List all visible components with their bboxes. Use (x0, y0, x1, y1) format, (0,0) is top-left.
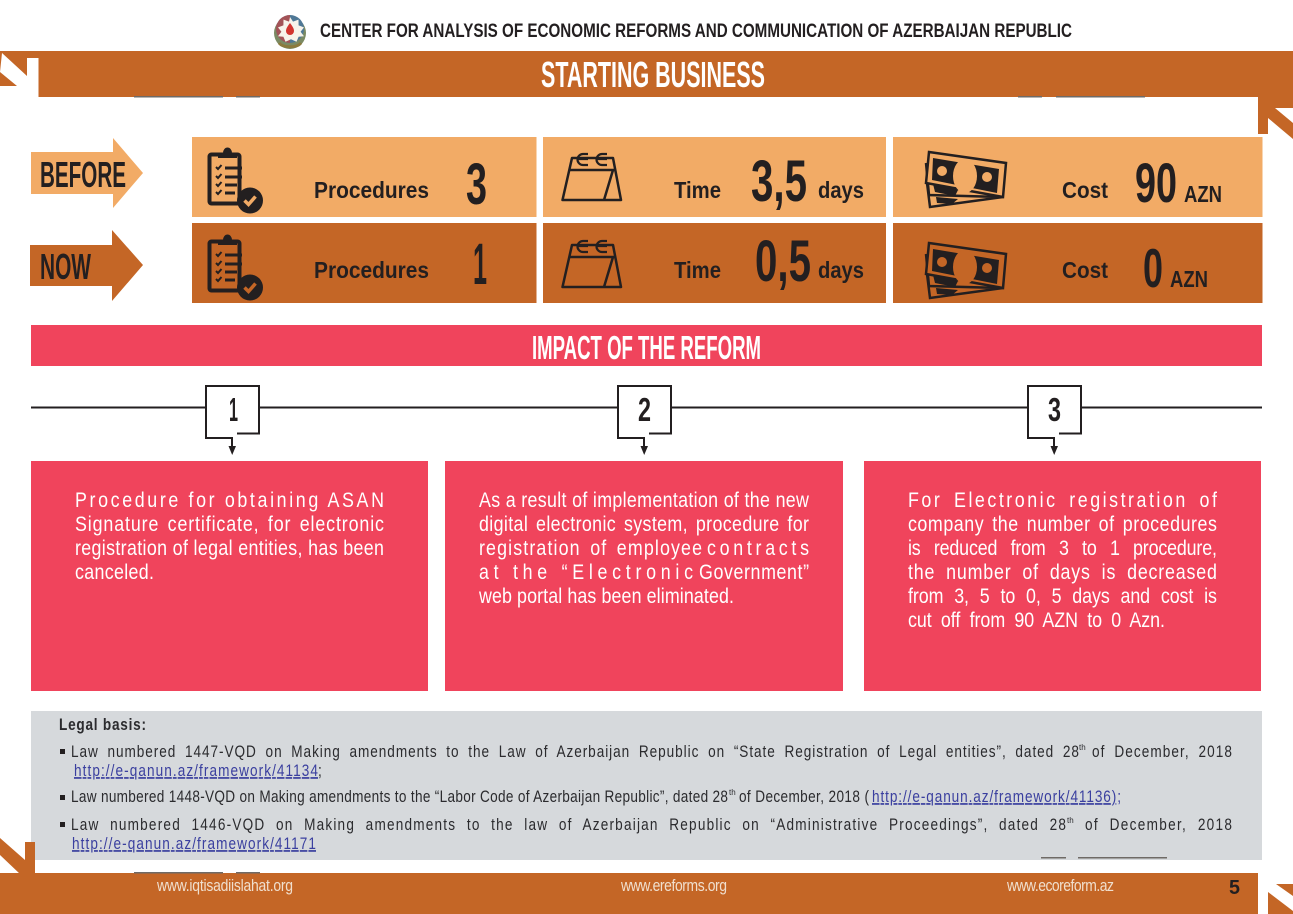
impact 2 text: web portal has been eliminated. (478, 585, 734, 608)
arrow label: now (30, 230, 143, 301)
marker: step 1 (206, 386, 259, 455)
impact 2 text: registration of employee (479, 537, 702, 560)
law 1448-VQD: Law numbered 1448-VQD on Making amendments to the “Labor Code of Azerbaijan Republic”, dated 28 (71, 788, 728, 806)
arrow label: now: NOW (40, 246, 91, 287)
law 1447-VQD: of December, 2018 (1092, 743, 1232, 761)
header organisation name: CENTER FOR ANALYSIS OF ECONOMIC REFORMS AND COMMUNICATION OF AZERBAIJAN REPUBLIC (320, 21, 1072, 42)
marker: step 3 (1028, 386, 1081, 455)
impact 3 text (908, 489, 1217, 632)
icon: emblem of Azerbaijan (274, 15, 306, 49)
icon: clipboard (210, 148, 263, 214)
law 1448-VQD: th (729, 788, 736, 797)
law 1448-VQD: of December, 2018 ( (739, 788, 870, 806)
panel: impact 1 (31, 461, 428, 691)
label: procedures: Procedures (314, 257, 429, 283)
label: cost: Cost (1062, 177, 1108, 203)
impact 3 text: is reduced from 3 to 1 procedure, (908, 537, 1217, 560)
heading: impact of the reform (31, 325, 1262, 366)
law 1446-VQD: http://e-qanun.az/framework/41171 (72, 835, 316, 853)
panel: now time (543, 223, 886, 303)
arrow label: before: BEFORE (40, 154, 126, 195)
page number: 5 (1229, 877, 1240, 899)
panel: legal basis (31, 711, 1262, 860)
impact 2 text: Government” (699, 561, 809, 584)
panel: before time (543, 137, 886, 217)
icon: clipboard (210, 234, 263, 300)
label: procedures: Procedures (314, 177, 429, 203)
impact 3 text: from 3, 5 to 0, 5 days and cost is (908, 585, 1217, 608)
label: cost: Cost (1062, 257, 1108, 283)
panel: now cost (893, 223, 1262, 303)
impact 2 text (478, 489, 810, 608)
legal basis heading: Legal basis: (59, 716, 146, 734)
value: 90 AZN: 90 (1135, 151, 1177, 214)
footer (0, 872, 1293, 914)
impact 2 text: As a result of implementation of the new (479, 489, 810, 512)
impact 1 text: Signature certificate, for electronic (75, 513, 384, 536)
law 1447-VQD: http://e-qanun.az/framework/41134 (74, 762, 318, 780)
law 1446-VQD (60, 816, 1232, 853)
icon: banknotes (926, 243, 1006, 298)
impact 1 text: registration of legal entities, has been (75, 537, 384, 560)
impact 2 text: digital electronic system, procedure for (479, 513, 809, 536)
decorative arrow corner top left (0, 53, 38, 97)
unit: AZN: AZN (1170, 266, 1208, 292)
law 1446-VQD: th (1067, 816, 1074, 825)
marker: step 3: 3 (1048, 391, 1061, 428)
footer link 3: www.ecoreform.az (1006, 877, 1114, 895)
law 1447-VQD: ; (318, 762, 322, 780)
panel: before procedures (192, 137, 536, 217)
law 1448-VQD: http://e-qanun.az/framework/41136); (872, 788, 1121, 806)
law 1447-VQD: th (1079, 743, 1086, 752)
icon: arrow corner bottom left (0, 838, 35, 874)
title banner (0, 51, 1293, 98)
unit: AZN: AZN (1184, 181, 1222, 207)
marker: step 2 (618, 386, 671, 455)
impact 3 text: cut off from 90 AZN to 0 Azn. (908, 609, 1165, 632)
law 1447-VQD: Law numbered 1447-VQD on Making amendments to the Law of Azerbaijan Republic on “State Registration of Legal entities”, dated 28 (71, 743, 1079, 761)
unit: days: days (818, 177, 864, 203)
impact 3 text: company the number of procedures (908, 513, 1217, 536)
label: time: Time (674, 257, 721, 283)
law 1446-VQD: Law numbered 1446-VQD on Making amendments to the law of Azerbaijan Republic on “Administrative Proceedings”, dated 28 (71, 816, 1066, 834)
title: STARTING BUSINESS (541, 54, 765, 95)
marker: step 2: 2 (638, 391, 651, 428)
value: 3 procedures: 3 (466, 152, 487, 217)
icon: arrow corner top right (1258, 97, 1293, 139)
decorative arrow corner bottom right (1268, 884, 1293, 914)
icon: calendar (562, 241, 621, 287)
page header (274, 15, 1072, 49)
panel: before cost (893, 137, 1262, 217)
value: 0,5 days: 0,5 (755, 229, 811, 294)
impact 2 text: contracts (707, 537, 809, 560)
unit: days: days (818, 257, 864, 283)
panel: now procedures: 1 (473, 232, 487, 297)
impact 1 text: canceled. (75, 561, 154, 584)
value: 0 AZN: 0 (1143, 237, 1163, 299)
law 1446-VQD: of December, 2018 (1085, 816, 1232, 834)
law 1447-VQD (60, 743, 1232, 780)
icon: banknotes (926, 152, 1006, 207)
impact 1 text: Procedure for obtaining ASAN (75, 489, 384, 512)
arrow label: before (31, 138, 143, 208)
law 1448-VQD (60, 788, 1121, 806)
impact 1 text (75, 489, 384, 584)
impact 3 text: the number of days is decreased (908, 561, 1217, 584)
panel: now procedures (192, 223, 536, 303)
label: time: Time (674, 177, 721, 203)
panel: impact 3 (864, 461, 1261, 691)
footer link 2: www.ereforms.org (620, 877, 727, 895)
impact 3 text: For Electronic registration of (908, 489, 1217, 512)
icon: calendar (562, 154, 621, 200)
panel: impact 2 (445, 461, 843, 691)
value: 3,5 days: 3,5 (751, 149, 807, 214)
impact 2 text: at the “Electronic (479, 561, 693, 584)
marker: step 1: 1 (229, 391, 238, 428)
heading: impact of the reform: IMPACT OF THE REFORM (532, 329, 761, 366)
footer link 1: www.iqtisadiislahat.org (156, 877, 293, 895)
